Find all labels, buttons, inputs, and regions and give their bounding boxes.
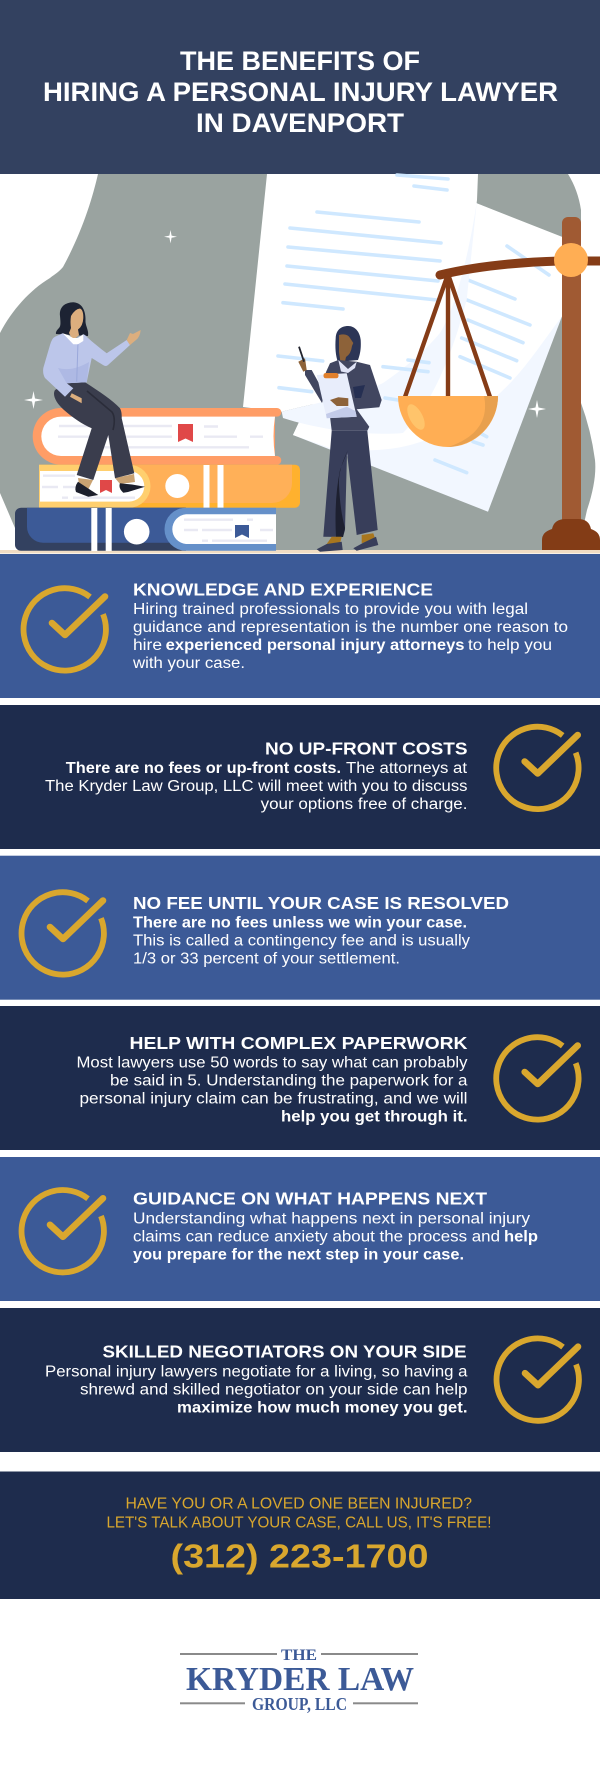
- clipboard: [317, 373, 357, 418]
- icon: check circle: [496, 1037, 579, 1120]
- title: HIRING A PERSONAL INJURY LAWYER: [43, 77, 558, 107]
- heading: HELP WITH COMPLEX PAPERWORK: [130, 1033, 468, 1053]
- body text: help you get through it.: [281, 1109, 468, 1126]
- benefit card: guidance: [0, 1157, 600, 1301]
- face: [339, 334, 353, 366]
- body text: There are no fees or up-front costs.: [66, 760, 341, 777]
- hero illustration: [0, 174, 600, 553]
- body text: [45, 1364, 468, 1417]
- heading: KNOWLEDGE AND EXPERIENCE: [133, 580, 433, 600]
- shoes: [317, 542, 343, 552]
- body text: The attorneys at: [346, 760, 468, 777]
- top book: [33, 408, 281, 465]
- call to action text: HAVE YOU OR A LOVED ONE BEEN INJURED?: [126, 1495, 472, 1512]
- body text: [45, 760, 468, 813]
- icon: check circle: [24, 588, 106, 671]
- body text: There are no fees unless we win your case.: [133, 914, 467, 931]
- body text: personal injury claim can be frustrating, and we will: [80, 1091, 468, 1108]
- hand on knee: [70, 393, 82, 403]
- body text: experienced personal injury attorneys: [166, 637, 464, 654]
- background blob: [0, 174, 595, 551]
- body text: Hiring trained professionals to provide you with legal: [133, 601, 528, 618]
- header banner: [0, 0, 600, 174]
- socks: [327, 537, 342, 544]
- body text: [133, 1210, 538, 1263]
- hair: [56, 302, 88, 336]
- base: [542, 519, 600, 550]
- front document sheet: [243, 174, 478, 434]
- body text: to help you: [468, 637, 552, 654]
- beam: [440, 261, 600, 275]
- ground line: [0, 550, 600, 553]
- shirt: [43, 333, 130, 397]
- body text: 1/3 or 33 percent of your settlement.: [133, 951, 400, 968]
- collar: [63, 333, 83, 344]
- woman with clipboard: [298, 326, 382, 552]
- phone number: (312) 223-1700: [170, 1537, 428, 1574]
- body text: [132, 601, 568, 672]
- body text: This is called a contingency fee and is usually: [133, 933, 470, 950]
- logo: GROUP, LLC: [252, 1694, 347, 1714]
- benefit card: complex paperwork: [0, 1006, 600, 1150]
- call to action text: LET'S TALK ABOUT YOUR CASE, CALL US, IT'S FREE!: [106, 1514, 492, 1531]
- body text: shrewd and skilled negotiator on your side can help: [80, 1382, 468, 1399]
- heading: GUIDANCE ON WHAT HAPPENS NEXT: [133, 1189, 487, 1209]
- body text: maximize how much money you get.: [177, 1400, 468, 1417]
- body text: Personal injury lawyers negotiate for a living, so having a: [45, 1364, 468, 1381]
- logo: [180, 1647, 418, 1714]
- heading: SKILLED NEGOTIATORS ON YOUR SIDE: [102, 1342, 466, 1362]
- raised hand: [127, 330, 141, 345]
- icon: check circle: [22, 1190, 104, 1272]
- face: [69, 308, 83, 340]
- book stack: [15, 408, 300, 551]
- benefit card: knowledge and experience: [0, 554, 600, 698]
- trousers: [323, 431, 378, 537]
- body text: with your case.: [132, 655, 245, 672]
- collar: [338, 360, 357, 373]
- hub: [554, 243, 588, 277]
- body text: guidance and representation is the number one reason to: [133, 619, 568, 636]
- heading: NO FEE UNTIL YOUR CASE IS RESOLVED: [133, 893, 509, 913]
- call to action text: [106, 1495, 492, 1531]
- scales of justice: [398, 217, 600, 550]
- benefit card: no up-front costs: [0, 705, 600, 849]
- pencil hand: [298, 358, 307, 372]
- body text: Most lawyers use 50 words to say what can probably: [76, 1055, 468, 1072]
- title: [43, 46, 558, 138]
- logo: THE: [281, 1647, 317, 1664]
- shoes and ankles: [78, 478, 93, 492]
- pole: [562, 217, 581, 522]
- body text: [76, 1055, 468, 1126]
- hand on clipboard: [330, 397, 348, 406]
- title: IN DAVENPORT: [196, 108, 405, 138]
- middle book: [39, 465, 300, 508]
- pan: [398, 396, 498, 447]
- body text: [133, 914, 470, 968]
- trousers: [54, 382, 134, 480]
- sparkles: [24, 230, 546, 418]
- benefit card: skilled negotiators: [0, 1308, 600, 1452]
- body text: The Kryder Law Group, LLC will meet with you to discuss: [45, 778, 468, 795]
- jacket: [305, 360, 382, 431]
- body text: Understanding what happens next in personal injury: [133, 1210, 530, 1227]
- heading: NO UP-FRONT COSTS: [265, 739, 468, 759]
- body text: hire: [133, 637, 162, 654]
- hanging cords: [405, 277, 490, 397]
- woman seated on books: [43, 302, 145, 497]
- benefit card: no fee until resolved: [0, 856, 600, 1000]
- icon: check circle: [497, 1338, 579, 1421]
- icon: check circle: [496, 727, 579, 809]
- hair: [335, 326, 361, 362]
- back document sheet: [293, 203, 575, 512]
- bottom book: [15, 508, 276, 551]
- body text: claims can reduce anxiety about the process and: [133, 1228, 500, 1245]
- body text: you prepare for the next step in your case.: [133, 1246, 464, 1263]
- body text: be said in 5. Understanding the paperwork for a: [110, 1073, 468, 1090]
- pencil: [299, 347, 304, 362]
- title: THE BENEFITS OF: [180, 46, 420, 76]
- body text: your options free of charge.: [261, 796, 468, 813]
- logo: KRYDER LAW: [186, 1661, 414, 1698]
- icon: check circle: [22, 892, 104, 975]
- body text: help: [504, 1228, 538, 1245]
- call to action panel: [0, 1472, 600, 1599]
